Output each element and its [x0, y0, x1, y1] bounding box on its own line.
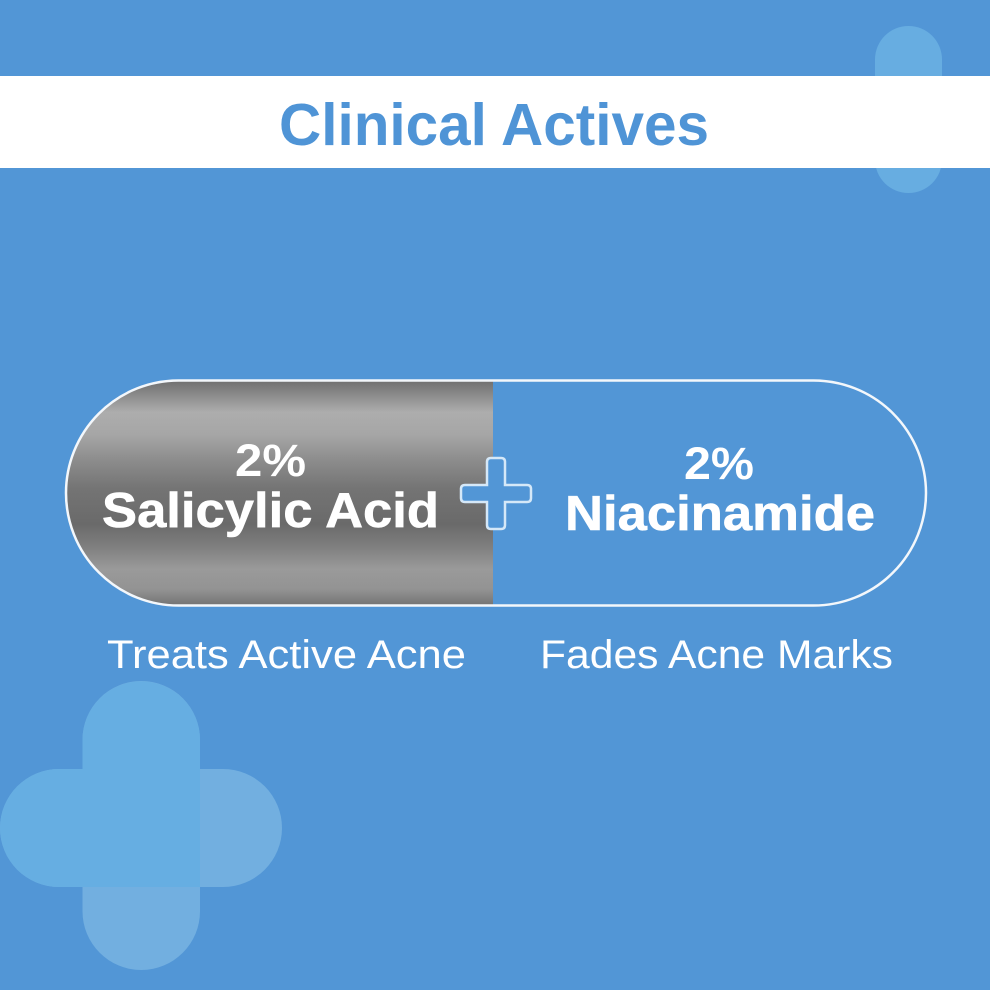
plus icon — [461, 458, 531, 529]
right label: 2% — [684, 438, 754, 489]
left label: 2% — [235, 435, 306, 486]
title banner — [0, 76, 990, 168]
title: Clinical Actives — [279, 92, 709, 158]
right label: Niacinamide — [565, 487, 875, 541]
right label — [565, 438, 875, 541]
capsule left half: grey — [67, 381, 493, 605]
left label: Salicylic Acid — [102, 484, 439, 538]
caption: right: Fades Acne Marks — [540, 633, 893, 677]
caption: left: Treats Active Acne — [107, 633, 466, 677]
decorative cross: bottom left — [0, 681, 282, 970]
capsule — [66, 380, 926, 606]
decorative cross: top right — [875, 26, 942, 193]
left label — [102, 435, 439, 538]
capsule outline — [66, 380, 926, 606]
